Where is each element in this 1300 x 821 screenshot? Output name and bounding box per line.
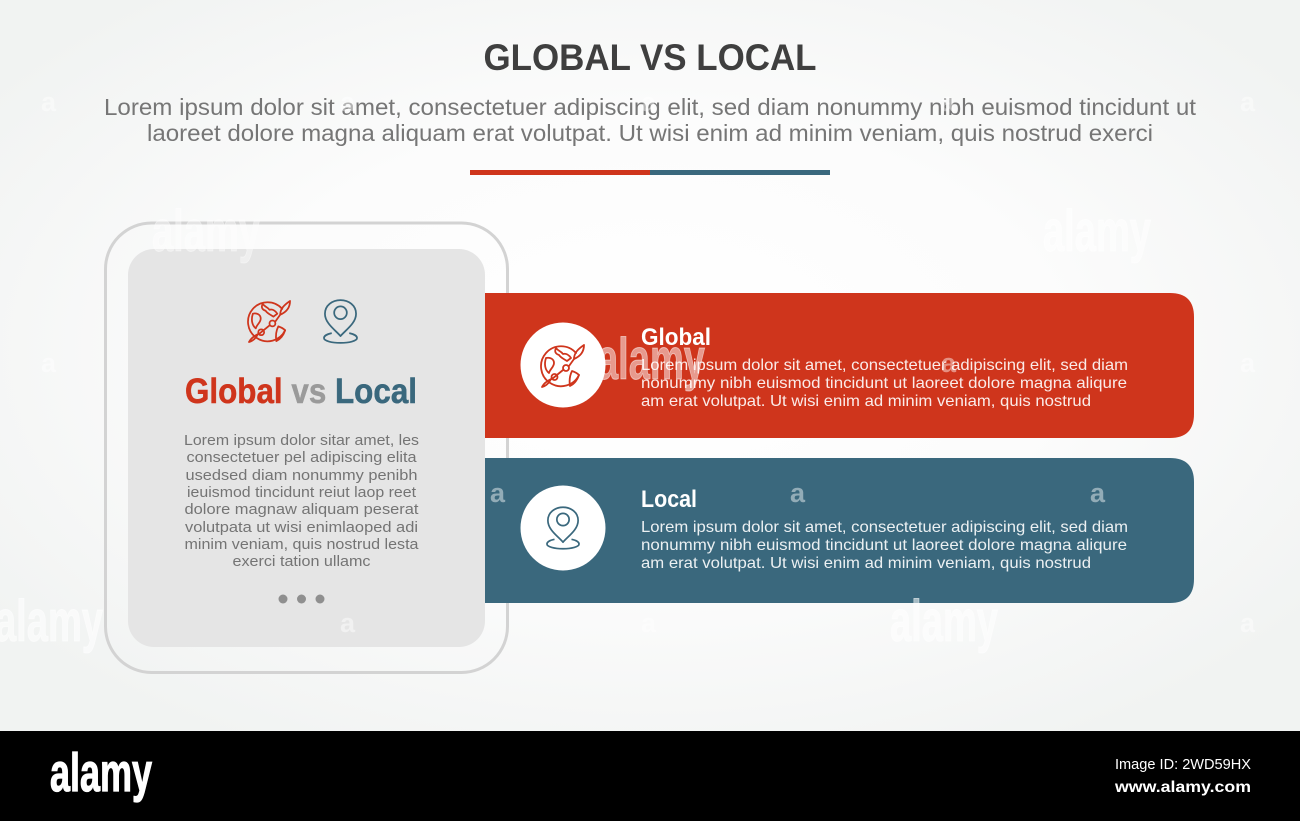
- watermarks: a: [41, 87, 57, 117]
- card body text: consectetuer pel adipiscing elita: [186, 450, 418, 466]
- watermarks: alamy: [597, 327, 705, 392]
- title underline: [470, 170, 830, 175]
- local body text: [641, 519, 1128, 572]
- card body text: minim veniam, quis nostrud lesta: [184, 537, 420, 553]
- icon: global circle: [520, 322, 606, 408]
- watermarks: a: [1090, 478, 1106, 508]
- watermarks: a: [641, 87, 657, 117]
- global body text: [641, 357, 1128, 410]
- panel: summary card: [128, 249, 485, 647]
- watermarks: a: [641, 608, 657, 638]
- watermarks: a: [1240, 608, 1256, 638]
- card body text: [184, 433, 420, 570]
- subtitle text: laoreet dolore magna aliquam erat volutpat. Ut wisi enim ad minim veniam, quis nostrud exerci: [147, 120, 1153, 146]
- watermarks: alamy: [1043, 199, 1151, 264]
- local heading: Local: [641, 486, 697, 513]
- icon: globe: [248, 301, 290, 342]
- global body text: nonummy nibh euismod tincidunt ut laoreet dolore magna aliqure: [641, 375, 1127, 392]
- watermarks: a: [340, 87, 356, 117]
- card body text: dolore magnaw aliquam peserat: [184, 502, 418, 518]
- watermarks: a: [790, 478, 806, 508]
- local body text: am erat volutpat. Ut wisi enim ad minim veniam, quis nostrud: [641, 555, 1091, 572]
- local body text: Lorem ipsum dolor sit amet, consectetuer adipiscing elit, sed diam: [641, 519, 1128, 536]
- icon: location pin: [324, 300, 357, 343]
- global heading: Global: [641, 324, 711, 351]
- icon: local circle: [520, 486, 606, 570]
- card body text: exerci tation ullamc: [232, 554, 370, 570]
- panel: global bar: [485, 293, 1194, 438]
- card heading: Global vs Local: [185, 372, 417, 411]
- card body text: usedsed diam nonummy penibh: [186, 468, 418, 484]
- watermarks: a: [490, 478, 506, 508]
- watermarks: a: [940, 87, 956, 117]
- footer bar: [0, 731, 1300, 821]
- panel: local bar: [485, 458, 1194, 603]
- watermarks: alamy: [890, 589, 998, 654]
- watermarks: a: [1240, 348, 1256, 378]
- watermarks: alamy: [152, 199, 260, 264]
- pagination dots: [278, 594, 324, 604]
- watermarks: a: [1240, 87, 1256, 117]
- subtitle text: [104, 94, 1197, 146]
- subtitle text: Lorem ipsum dolor sit amet, consectetuer adipiscing elit, sed diam nonummy nibh euismod tincidunt ut: [104, 94, 1197, 120]
- card body text: ieuismod tincidunt reiut laop reet: [187, 485, 416, 501]
- watermarks: a: [41, 348, 57, 378]
- watermarks: a: [340, 608, 356, 638]
- global body text: Lorem ipsum dolor sit amet, consectetuer adipiscing elit, sed diam: [641, 357, 1128, 374]
- title: GLOBAL VS LOCAL: [484, 37, 816, 78]
- footer logo: alamy: [50, 743, 152, 803]
- watermarks: [0, 87, 1256, 654]
- website: www.alamy.com: [1114, 779, 1251, 796]
- global body text: am erat volutpat. Ut wisi enim ad minim veniam, quis nostrud: [641, 393, 1091, 410]
- image id: Image ID: 2WD59HX: [1115, 756, 1251, 773]
- panel: outer outline: [106, 223, 508, 672]
- card body text: volutpata ut wisi enimlaoped adi: [185, 520, 418, 536]
- card body text: Lorem ipsum dolor sitar amet, les: [184, 433, 419, 449]
- local body text: nonummy nibh euismod tincidunt ut laoreet dolore magna aliqure: [641, 537, 1127, 554]
- watermarks: a: [941, 348, 957, 378]
